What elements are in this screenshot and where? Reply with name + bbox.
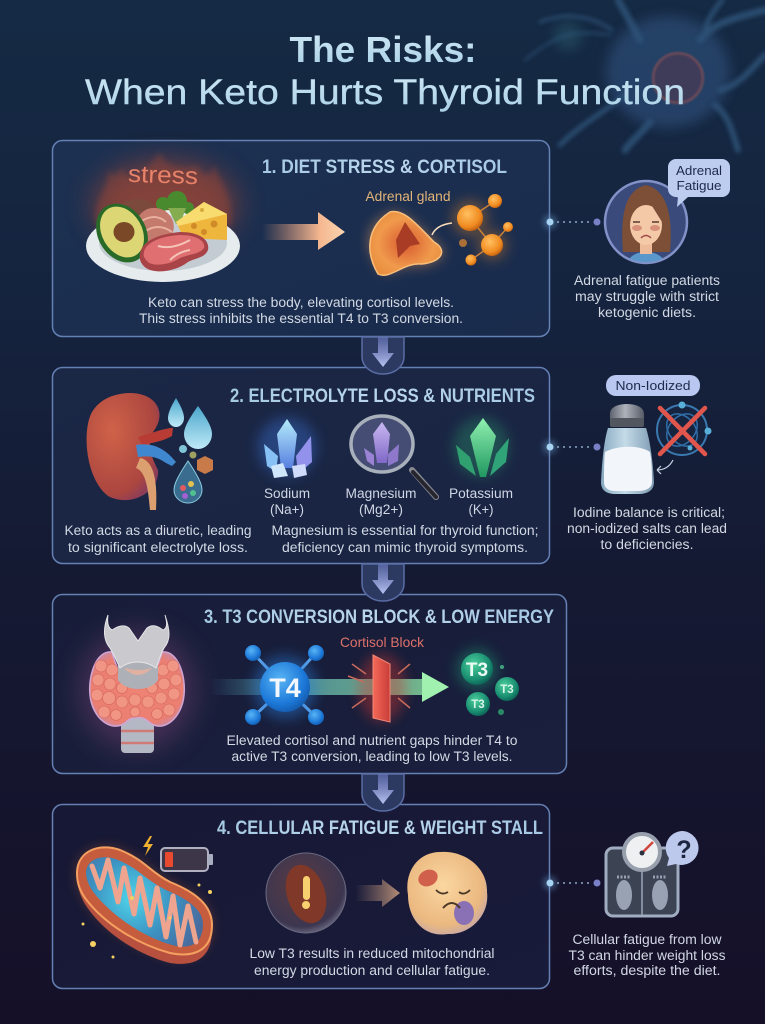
body text 4: Low T3 results in reduced mitochondrial: [250, 946, 494, 961]
side connector 2: [543, 440, 600, 454]
body text 3: active T3 conversion, leading to low T3 levels.: [232, 749, 512, 764]
side text 1: Adrenal fatigue patients: [574, 273, 720, 288]
connector arrow 3: [362, 774, 404, 811]
side text 4: efforts, despite the diet.: [574, 963, 720, 978]
heading 1: 1. DIET STRESS & CORTISOL: [262, 157, 507, 178]
title: [85, 29, 685, 112]
mineral labels: (Na+): [270, 502, 304, 517]
side text 1: ketogenic diets.: [598, 305, 696, 320]
ham: [130, 202, 180, 250]
icon: kidney: [87, 393, 176, 510]
label: cortisol block: Cortisol Block: [340, 634, 425, 650]
icon: T4 molecule: T4: [269, 673, 301, 703]
avocado pit: [114, 222, 134, 242]
mineral labels: (K+): [468, 502, 494, 517]
heading 3: 3. T3 CONVERSION BLOCK & LOW ENERGY: [204, 607, 554, 628]
body text 2 right: deficiency can mimic thyroid symptoms.: [282, 540, 528, 555]
icon: plate of keto foods: [86, 191, 240, 282]
icon: stressed mitochondrion sphere: [266, 853, 346, 933]
title: The Risks:: [290, 29, 476, 70]
side text 2: Iodine balance is critical;: [573, 505, 725, 520]
avocado: [86, 194, 158, 272]
connector arrow 2: [362, 564, 404, 601]
steak: [140, 232, 208, 271]
stress label: stress: [128, 161, 198, 190]
icon: bathroom scale: [606, 831, 699, 916]
icon: water drops and minerals: [168, 398, 213, 503]
icon: cortisol molecules: [452, 194, 513, 266]
side connector 1: [543, 215, 600, 229]
label: adrenal gland: Adrenal gland: [366, 189, 450, 204]
mitochondrion outer body: [77, 849, 212, 964]
icon: lightning bolt: [143, 836, 153, 856]
pill label: non-iodized: [606, 375, 700, 396]
side text 4: [568, 932, 726, 978]
icon: mitochondrion: [77, 847, 212, 964]
arrow: T4 to T3 beam: [210, 672, 449, 702]
side connector 4: [543, 876, 600, 890]
side text 2: to deficiencies.: [600, 537, 694, 552]
side text 4: T3 can hinder weight loss: [568, 948, 726, 963]
side text 2: [567, 505, 727, 552]
icon: adrenal gland: [369, 211, 452, 275]
sparkles: [82, 884, 212, 958]
heading 4: 4. CELLULAR FATIGUE & WEIGHT STALL: [217, 818, 543, 839]
trachea: [121, 716, 154, 753]
side text 1: may struggle with strict: [575, 289, 719, 304]
question bubble: [666, 831, 699, 866]
thyroid lobes: [90, 652, 184, 726]
title: When Keto Hurts Thyroid Function: [85, 72, 685, 112]
icon: magnifier with magnesium crystal: [351, 416, 436, 497]
side note 1: adrenal fatigue avatar: Fatigue: [676, 178, 722, 193]
side text 2: non-iodized salts can lead: [567, 521, 727, 536]
mineral labels: Sodium: [264, 486, 310, 501]
neuron nucleus: [653, 53, 703, 103]
icon: thyroid gland: [79, 615, 195, 753]
lip of cricoid: [124, 668, 152, 675]
pill label: non-iodized: Non-Iodized: [616, 378, 690, 393]
body text 2 right: Magnesium is essential for thyroid function;: [272, 523, 538, 538]
icon: T3 molecules: [456, 648, 519, 716]
icon: bathroom scale: ?: [676, 836, 692, 864]
avatar portrait: [622, 185, 671, 268]
body text 3: [226, 733, 518, 764]
broccoli: [156, 191, 194, 224]
icon: crossed-out iodine atom: [657, 402, 712, 474]
body text 1: [139, 295, 463, 326]
panel 4: cellular fatigue and weight stall: [52, 804, 550, 988]
icon: T3 molecules: T3: [466, 660, 488, 681]
thyroid lobules: [91, 660, 182, 720]
steak marbling: [158, 240, 190, 260]
cheese holes: [191, 208, 218, 235]
body text 1: Keto can stress the body, elevating cortisol levels.: [148, 295, 454, 310]
cristae folds: [92, 860, 196, 945]
roast: [117, 197, 155, 221]
panel 1: diet stress and cortisol: [52, 140, 550, 336]
arrow: plate to gland: [262, 212, 345, 250]
side note 1: adrenal fatigue avatar: [605, 159, 730, 268]
icon: T3 molecules: T3: [471, 699, 485, 711]
steak top: [144, 235, 204, 265]
heading 2: 2. ELECTROLYTE LOSS & NUTRIENTS: [230, 386, 535, 407]
body text 2 left: [64, 523, 251, 555]
background neuron decoration: [525, 0, 765, 150]
trachea rings: [121, 731, 154, 743]
mineral labels: Magnesium: [346, 486, 416, 501]
body text 4: energy production and cellular fatigue.: [254, 963, 490, 978]
speech bubble: [668, 159, 730, 207]
panel 2: electrolyte loss and nutrients: [52, 368, 550, 564]
side text 1: [574, 273, 720, 320]
body text 2 right: [272, 523, 538, 555]
icon: sad cell: [407, 852, 487, 935]
arrow: sphere to cell: [355, 879, 400, 907]
icon: T3 molecules: T3: [500, 684, 514, 696]
icon: flames behind plate: [93, 152, 237, 249]
cricoid: [118, 660, 158, 689]
icon: cortisol block barrier: [348, 654, 410, 722]
mineral labels: (Mg2+): [359, 502, 403, 517]
icon: sodium crystals: [257, 417, 317, 478]
cheese top: [176, 202, 227, 226]
cheese: [176, 202, 227, 240]
icon: low battery: [161, 848, 213, 871]
connector arrow 1: [362, 337, 404, 374]
ham stripes: [140, 217, 172, 232]
body text 2 left: Keto acts as a diuretic, leading: [64, 523, 251, 538]
body text 2 left: to significant electrolyte loss.: [68, 540, 248, 555]
icon: potassium crystal: [453, 417, 509, 477]
mineral labels: [264, 486, 513, 517]
mineral labels: Potassium: [449, 486, 513, 501]
icon: T4 molecule: [245, 645, 324, 725]
body text 3: Elevated cortisol and nutrient gaps hinder T4 to: [226, 733, 518, 748]
thyroid cartilage: [104, 615, 169, 668]
mitochondrion rim: [77, 847, 212, 954]
mitochondrion matrix: [86, 857, 203, 947]
side note 1: adrenal fatigue avatar: Adrenal: [676, 163, 722, 178]
panel 3: T3 conversion block and low energy: [52, 594, 566, 774]
body text 1: This stress inhibits the essential T4 to T3 conversion.: [139, 311, 463, 326]
icon: salt shaker: [601, 404, 654, 494]
body text 4: [250, 946, 494, 978]
side text 4: Cellular fatigue from low: [572, 932, 722, 947]
avocado flesh: [91, 199, 153, 265]
